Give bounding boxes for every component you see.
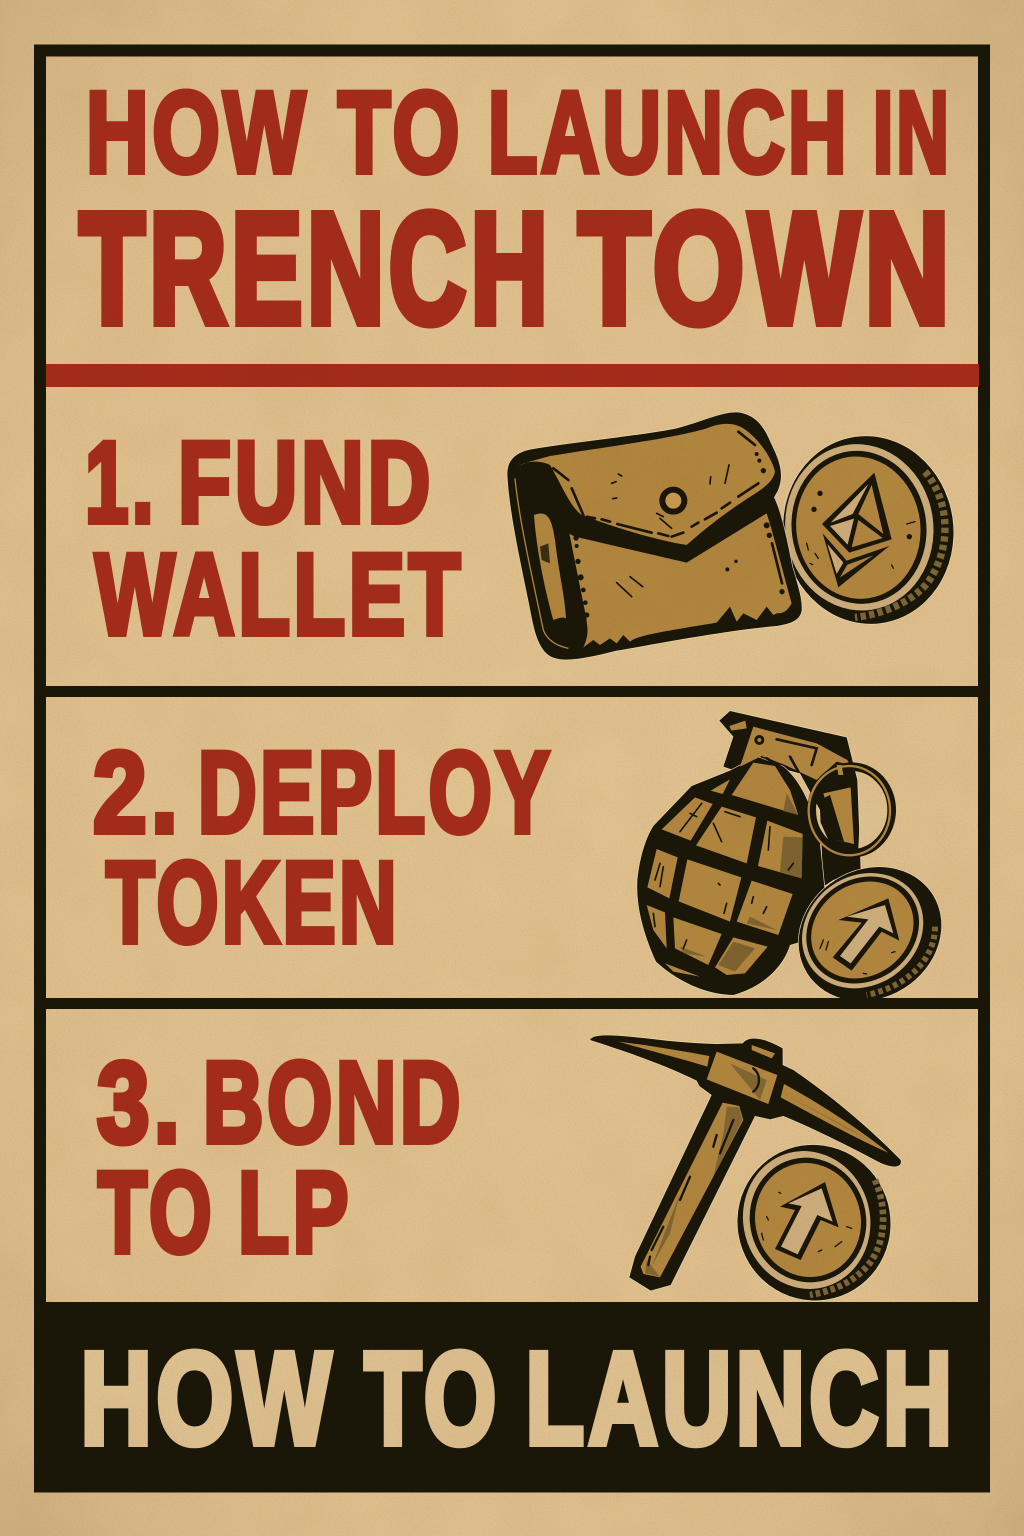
token coin	[716, 1123, 912, 1322]
step 2 heading: 2.	[93, 729, 182, 857]
step 3 heading: LP	[238, 1149, 352, 1277]
wallet	[507, 412, 802, 660]
step 3 heading: TO	[98, 1149, 215, 1277]
step 1 heading	[85, 419, 464, 659]
icon: wallet with ethereum coin	[507, 412, 966, 660]
title: IN	[873, 69, 952, 197]
step 2 heading: DEPLOY	[198, 729, 553, 857]
footer text	[80, 1324, 956, 1472]
red divider bar	[46, 364, 979, 387]
step 3 heading: 3.	[97, 1039, 184, 1167]
divider between steps 2 and 3	[46, 998, 979, 1009]
divider between steps 1 and 2	[46, 686, 979, 697]
step 2 heading: TOKEN	[106, 839, 400, 967]
step 2 heading	[93, 729, 553, 967]
title	[80, 69, 954, 356]
panel: step 1 fund wallet	[85, 412, 966, 660]
step 3 heading	[97, 1039, 464, 1277]
footer text: HOW	[80, 1324, 336, 1472]
icon: grenade with token coin	[637, 711, 967, 1027]
icon: pickaxe with token coin	[590, 1035, 912, 1322]
title: LAUNCH	[488, 69, 850, 197]
footer band	[46, 1302, 979, 1486]
pull ring	[858, 775, 884, 849]
step 1 heading: 1.	[85, 419, 157, 547]
title: TO	[338, 69, 463, 197]
step 3 heading: BOND	[203, 1039, 464, 1167]
step 1 heading: FUND	[178, 419, 434, 547]
panel: step 2 deploy token	[93, 711, 967, 1027]
title: HOW	[86, 69, 309, 197]
panel: step 3 bond to LP	[97, 1035, 912, 1322]
step 1 heading: WALLET	[95, 531, 464, 659]
title: TRENCH	[80, 182, 552, 356]
token coin	[773, 841, 967, 1027]
coin	[771, 425, 966, 635]
footer text: TO	[364, 1324, 500, 1472]
